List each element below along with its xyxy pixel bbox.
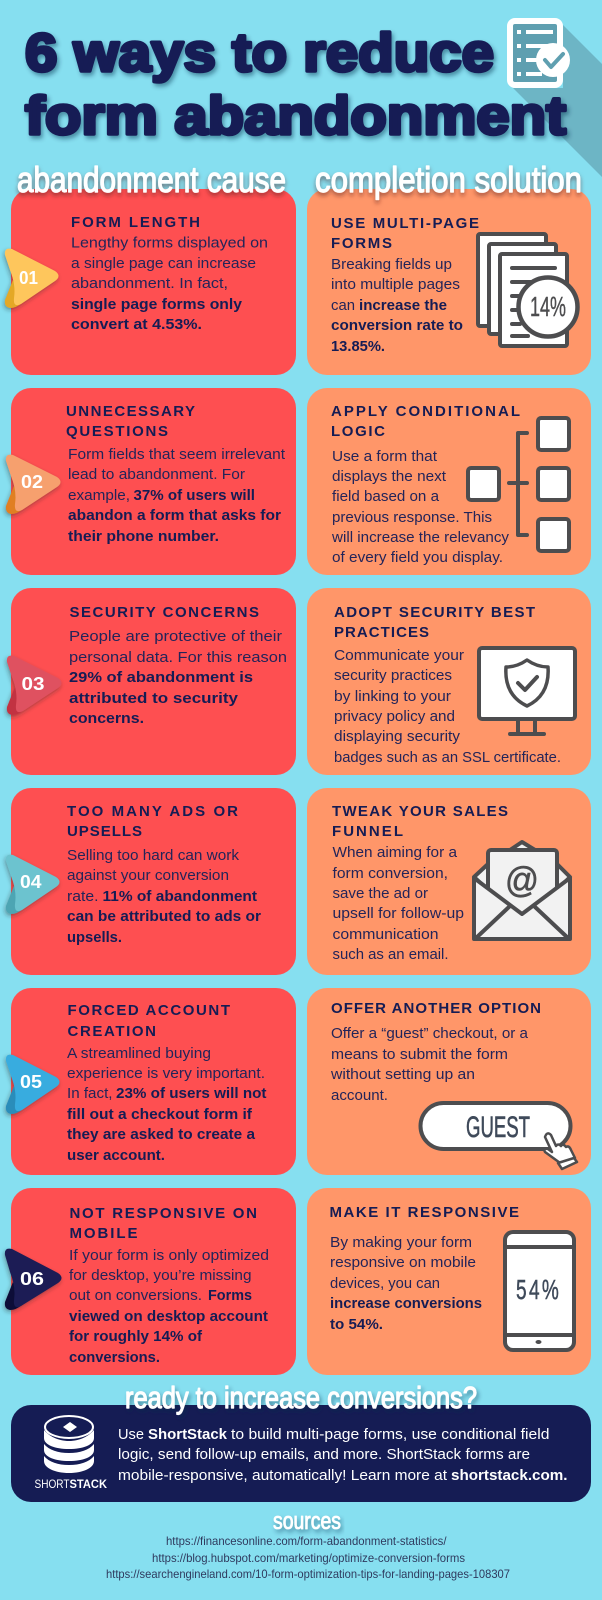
text: multi-page body: Breaking fields up — [331, 256, 452, 273]
badge 04 — [6, 855, 59, 914]
panel: cause 4, too many ads — [11, 788, 296, 975]
icon: conditional branching boxes — [468, 418, 569, 551]
text: security practices body: by linking to your — [334, 688, 451, 705]
text: sales funnel body: save the ad or — [332, 885, 428, 902]
text: unnecessary questions body: Form fields that seem irrelevant — [68, 446, 286, 463]
icon: stacked pages with 14%: 14% — [530, 291, 566, 322]
panel: cause 3, security concerns — [11, 588, 296, 775]
text: conditional logic body — [331, 448, 510, 566]
text: unnecessary questions body: lead to abandonment. For — [68, 466, 245, 483]
text: conditional logic body: will increase the relevancy — [331, 529, 510, 546]
text: forced account body: user account. — [67, 1147, 165, 1164]
text: conditional logic body: displays the next — [332, 468, 447, 485]
text: not responsive body — [69, 1247, 269, 1366]
heading: apply conditional logic — [331, 403, 520, 440]
heading: too many ads or upsells: TOO MANY ADS OR — [67, 803, 238, 820]
text: form length body — [71, 234, 268, 333]
text: source links — [106, 1534, 510, 1581]
heading: make it responsive: MAKE IT RESPONSIVE — [330, 1204, 519, 1221]
text: forced account body: experience is very important. — [67, 1065, 265, 1082]
text: security concerns body: personal data. For this reason — [69, 649, 287, 666]
badge 01 — [5, 249, 58, 308]
text: security concerns body: attributed to security — [69, 690, 239, 707]
text: multi-page body: increase the — [359, 297, 447, 314]
heading: not responsive on mobile — [70, 1205, 257, 1242]
text: security concerns body: 29% of abandonment is — [69, 669, 253, 686]
panel: solution 3, security best practices — [307, 588, 591, 775]
text: unnecessary questions body: 37% of users will — [134, 487, 255, 504]
text: too many ads body: 11% of abandonment — [102, 888, 257, 905]
title — [25, 23, 566, 146]
text: offer another option body: Offer a “guest” checkout, or a — [331, 1025, 529, 1042]
text: ShortStack pitch: shortstack.com. — [451, 1467, 568, 1484]
heading: offer another option: OFFER ANOTHER OPTION — [331, 1000, 541, 1017]
badge 06: 06 — [20, 1269, 44, 1289]
heading: forced account creation — [68, 1002, 230, 1040]
heading: adopt security best practices: ADOPT SECURITY BEST — [334, 604, 535, 621]
panel: solution 1, multi-page forms — [307, 189, 591, 375]
text: sales funnel body: When aiming for a — [332, 844, 458, 861]
panel: solution 2, conditional logic — [307, 388, 591, 575]
text: forced account body: In fact, — [67, 1085, 112, 1102]
text: sales funnel body — [332, 844, 464, 963]
text: too many ads body — [67, 847, 261, 946]
heading: use multi-page forms — [331, 215, 479, 252]
badge 02: 02 — [21, 472, 43, 492]
text: form length body: Lengthy forms displayed on — [71, 234, 268, 252]
heading: tweak your sales funnel — [332, 803, 508, 840]
icon: open envelope with at sign: @ — [505, 859, 539, 900]
text: conditional logic body: field based on a — [332, 488, 440, 505]
badge 05 — [6, 1055, 59, 1114]
panel: cause 6, not responsive on mobile — [11, 1188, 296, 1375]
heading: abandonment cause: abandonment cause — [17, 159, 286, 200]
heading: unnecessary questions — [66, 403, 195, 440]
text: not responsive body: Forms — [208, 1287, 252, 1304]
badge 03: 03 — [22, 674, 44, 694]
panel: ShortStack call to action — [11, 1405, 591, 1502]
text: offer another option body: account. — [331, 1087, 388, 1104]
icon: guest button with hand cursor — [420, 1103, 577, 1169]
text: ShortStack pitch: Use — [118, 1426, 144, 1443]
text: make it responsive body: devices, you can — [330, 1275, 440, 1292]
badge 01: 01 — [19, 268, 38, 288]
text: form length body: abandonment. In fact, — [71, 275, 228, 292]
text: multi-page body: 13.85%. — [331, 338, 385, 355]
text: forced account body: A streamlined buying — [67, 1045, 211, 1062]
text: security concerns body: People are protective of their — [69, 628, 282, 645]
text: offer another option body: means to submit the form — [331, 1046, 508, 1063]
heading: apply conditional logic: APPLY CONDITIONAL — [331, 403, 520, 420]
heading: security concerns: SECURITY CONCERNS — [70, 604, 259, 621]
heading: ready to increase conversions: ready to increase conversions? — [125, 1380, 477, 1415]
text: ShortStack pitch: logic, send follow-up emails, and more. ShortStack forms are — [118, 1446, 530, 1463]
icon: ShortStack logo — [34, 1416, 107, 1491]
badge 05: 05 — [20, 1072, 42, 1092]
text: conditional logic body: previous response. This — [332, 509, 492, 526]
icon: phone showing 54%: 54% — [516, 1274, 561, 1306]
badge 06 — [5, 1249, 61, 1310]
text: make it responsive body: responsive on mobile — [330, 1254, 476, 1271]
text: sales funnel body: such as an email. — [332, 946, 448, 963]
panel: solution 6, make it responsive — [307, 1188, 591, 1375]
text: sales funnel body: form conversion, — [332, 865, 448, 882]
icon: open envelope with at sign — [474, 842, 570, 939]
text: form length body: convert at 4.53%. — [71, 316, 202, 333]
heading: tweak your sales funnel: FUNNEL — [332, 823, 403, 840]
text: multi-page body — [331, 256, 463, 355]
text: not responsive body: conversions. — [69, 1349, 160, 1366]
heading: unnecessary questions: UNNECESSARY — [66, 403, 195, 420]
icon: checklist form with long shadow — [510, 21, 602, 177]
heading: apply conditional logic: LOGIC — [331, 423, 385, 440]
icon: stacked pages with 14% — [478, 234, 578, 346]
heading: use multi-page forms: FORMS — [331, 235, 392, 252]
badge 04: 04 — [20, 872, 42, 892]
text: make it responsive body — [330, 1234, 482, 1333]
text: multi-page body: conversion rate to — [331, 317, 463, 334]
text: security concerns body — [69, 628, 287, 727]
logo wordmark: STACK — [70, 1477, 107, 1491]
heading: not responsive on mobile: NOT RESPONSIVE ON — [70, 1205, 257, 1222]
heading: forced account creation: CREATION — [68, 1023, 156, 1040]
badge 02 — [6, 455, 60, 514]
heading: sources: sources — [273, 1508, 341, 1535]
text: multi-page body: can — [331, 297, 355, 314]
logo wordmark: SHORT — [34, 1477, 70, 1491]
text: multi-page body: into multiple pages — [331, 276, 460, 293]
text: too many ads body: against your conversion — [67, 867, 229, 884]
panel: solution 5, offer another option — [307, 988, 591, 1175]
text: source links: https://searchengineland.com/10-form-optimization-tips-for-landing-pages-108307 — [106, 1567, 510, 1581]
text: sales funnel body: upsell for follow-up — [332, 905, 464, 922]
text: source links: https://blog.hubspot.com/marketing/optimize-conversion-forms — [152, 1551, 465, 1565]
text: forced account body: fill out a checkout form if — [67, 1106, 253, 1123]
text: unnecessary questions body — [68, 446, 286, 545]
text: unnecessary questions body: example, — [68, 487, 130, 504]
title: 6 ways to reduce — [25, 23, 494, 83]
heading: use multi-page forms: USE MULTI-PAGE — [331, 215, 479, 232]
text: too many ads body: can be attributed to ads or — [67, 908, 261, 925]
text: ShortStack pitch: ShortStack — [148, 1426, 228, 1443]
text: ShortStack pitch — [118, 1426, 568, 1484]
text: not responsive body: for roughly 14% of — [69, 1328, 203, 1345]
text: form length body: single page forms only — [71, 296, 243, 313]
text: security practices body: displaying security — [334, 728, 461, 745]
panel: cause 1, form length — [11, 189, 296, 375]
text: conditional logic body: Use a form that — [332, 448, 438, 465]
text: sales funnel body: communication — [332, 926, 438, 943]
badge 03 — [7, 656, 61, 715]
heading: form length: FORM LENGTH — [71, 214, 200, 231]
icon: guest button with hand cursor: GUEST — [466, 1111, 530, 1144]
text: make it responsive body: increase conversions — [330, 1295, 482, 1312]
text: not responsive body: viewed on desktop account — [69, 1308, 268, 1325]
icon: monitor with shield — [479, 648, 575, 734]
text: offer another option body — [330, 1025, 529, 1104]
heading: too many ads or upsells: UPSELLS — [67, 823, 142, 840]
text: unnecessary questions body: abandon a form that asks for — [68, 507, 281, 524]
text: unnecessary questions body: their phone number. — [68, 528, 219, 545]
text: security practices body: badges such as an SSL certificate. — [334, 749, 561, 766]
text: security practices body: privacy policy and — [334, 708, 455, 725]
panel: solution 4, sales funnel — [307, 788, 591, 975]
text: form length body: a single page can increase — [71, 255, 256, 272]
heading: not responsive on mobile: MOBILE — [70, 1225, 138, 1242]
icon: phone showing 54% — [505, 1232, 574, 1350]
logo wordmark — [34, 1477, 107, 1491]
panel: cause 5, forced account creation — [11, 988, 296, 1175]
text: forced account body: 23% of users will not — [116, 1085, 266, 1102]
text: not responsive body: If your form is only optimized — [69, 1247, 269, 1264]
heading: forced account creation: FORCED ACCOUNT — [68, 1002, 230, 1019]
text: offer another option body: without setting up an — [330, 1066, 475, 1083]
heading: tweak your sales funnel: TWEAK YOUR SALES — [332, 803, 508, 820]
text: make it responsive body: to 54%. — [330, 1316, 383, 1333]
text: forced account body — [67, 1045, 266, 1164]
title: form abandonment — [25, 86, 566, 146]
text: not responsive body: for desktop, you’re missing — [69, 1267, 251, 1284]
text: ShortStack pitch: mobile-responsive, automatically! Learn more at — [118, 1467, 448, 1484]
panel: cause 2, unnecessary questions — [11, 388, 296, 575]
text: security practices body — [334, 647, 561, 766]
text: not responsive body: out on conversions. — [69, 1287, 202, 1304]
text: too many ads body: Selling too hard can work — [67, 847, 240, 864]
text: forced account body: they are asked to create a — [67, 1126, 256, 1143]
text: security practices body: Communicate your — [334, 647, 464, 664]
text: security practices body: security practices — [334, 667, 452, 684]
text: too many ads body: rate. — [67, 888, 98, 905]
heading: adopt security best practices: PRACTICES — [334, 624, 429, 641]
heading: adopt security best practices — [334, 604, 535, 641]
text: source links: https://financesonline.com/form-abandonment-statistics/ — [166, 1534, 447, 1548]
text: security concerns body: concerns. — [69, 710, 144, 727]
text: conditional logic body: of every field you display. — [332, 549, 503, 566]
heading: too many ads or upsells — [67, 803, 238, 840]
text: too many ads body: upsells. — [67, 929, 122, 946]
heading: unnecessary questions: QUESTIONS — [66, 423, 168, 440]
text: make it responsive body: By making your form — [330, 1234, 472, 1251]
text: ShortStack pitch: to build multi-page forms, use conditional field — [231, 1426, 550, 1443]
